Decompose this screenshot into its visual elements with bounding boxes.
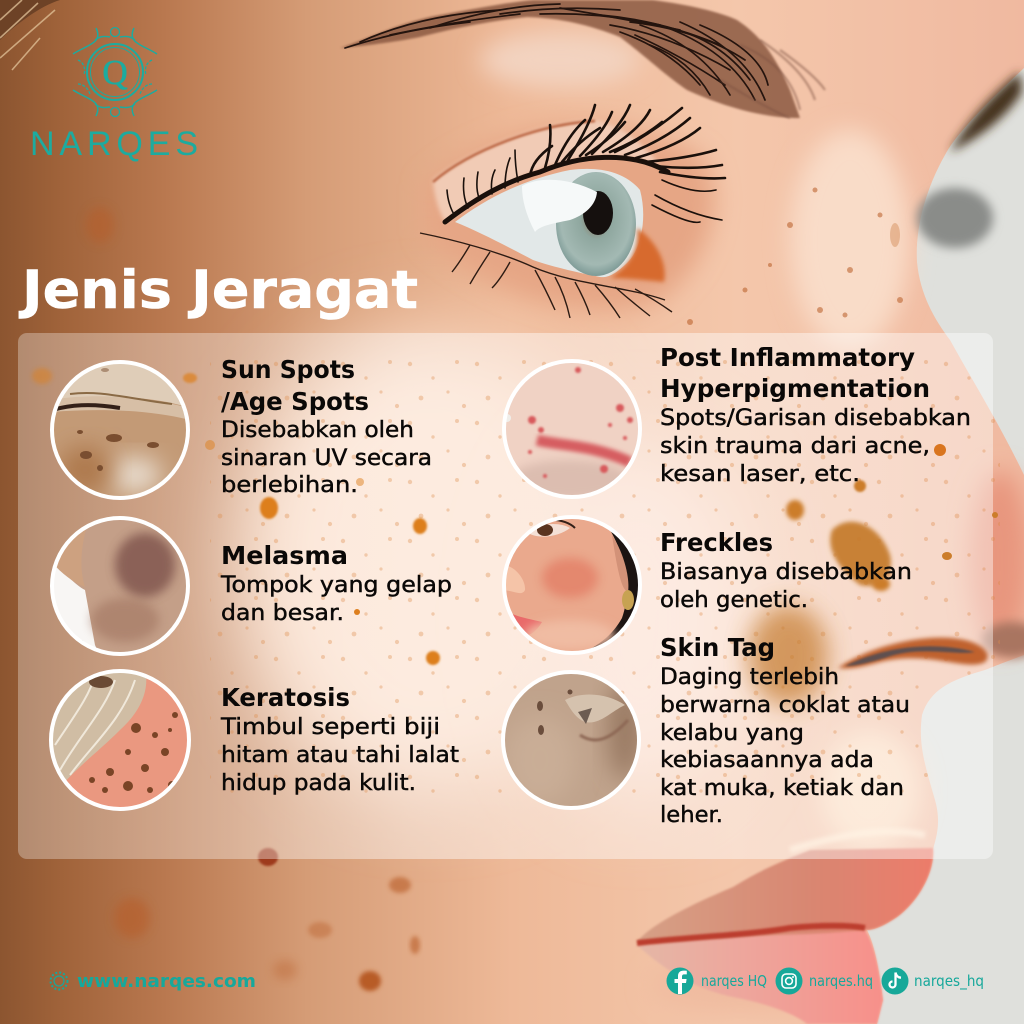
description: hyperpigmentation: kesan laser, etc. — [660, 462, 860, 487]
ring: sun spots — [52, 362, 188, 498]
iris and pupil — [556, 172, 636, 276]
website address: www.narqes.com — [77, 971, 256, 992]
eyebrow — [340, 0, 825, 118]
heading: post inflammatory: Post Inflammatory — [660, 343, 915, 372]
hair corner — [0, 0, 60, 40]
heading: skin tag: Skin Tag — [660, 633, 775, 662]
skin details showing through panel — [32, 360, 1000, 850]
philtrum highlight — [790, 831, 925, 850]
logo: Narqes — [30, 28, 198, 163]
description: skin tag: kebiasaannya ada — [660, 748, 874, 773]
description: hyperpigmentation: skin trauma dari acne, — [660, 434, 930, 459]
heading line 2: age spots: /Age Spots — [221, 387, 369, 416]
description: keratosis: Timbul seperti biji — [220, 715, 440, 740]
description: skin tag: kat muka, ketiak dan — [660, 776, 904, 801]
description: skin tag: Daging terlebih — [660, 665, 839, 690]
icon: website emblem — [50, 972, 68, 990]
photo: melasma — [54, 520, 186, 650]
photo: hyperpigmentation — [506, 363, 638, 495]
item: Post Inflammatory Hyperpigmentation — [502, 343, 971, 500]
description: melasma: dan besar. — [221, 601, 344, 626]
photo: skin tag — [505, 674, 637, 806]
background lashes, blurred — [950, 72, 1022, 152]
description: sun spots: berlebihan. — [221, 473, 358, 498]
description: sun spots: Disebabkan oleh — [221, 418, 414, 443]
eye — [420, 105, 725, 318]
description: skin tag: kelabu yang — [660, 721, 804, 746]
logo wordmark: NARQES — [30, 125, 198, 163]
ring: freckles — [504, 517, 640, 653]
nose shadow — [748, 605, 828, 705]
item: Keratosis — [50, 670, 459, 810]
description: skin tag: berwarna coklat atau — [660, 693, 910, 718]
skin blemishes below panel — [86, 188, 903, 991]
description: freckles: Biasanya disebabkan — [660, 560, 912, 585]
description: freckles: oleh genetic. — [660, 588, 808, 613]
photo: keratosis — [50, 670, 190, 810]
title: Jenis Jeragat — [19, 260, 418, 321]
nose blemish — [830, 522, 891, 586]
lower eyelashes — [420, 233, 672, 318]
description: melasma — [220, 573, 452, 626]
heading: melasma: Melasma — [221, 541, 348, 570]
icon: instagram — [776, 968, 802, 994]
description: keratosis: hitam atau tahi lalat — [221, 743, 459, 768]
icon: tiktok — [882, 968, 908, 994]
icon: facebook — [666, 968, 694, 994]
item: Skin Tag — [501, 633, 910, 828]
sclera — [455, 169, 643, 277]
photo: sun spots — [54, 364, 186, 496]
footer: social links — [666, 968, 984, 994]
footer: website — [50, 971, 256, 992]
eyelid — [433, 120, 660, 222]
upper eyelashes — [445, 105, 725, 222]
heading line 2: hyperpigmentation: Hyperpigmentation — [660, 374, 930, 403]
spots — [32, 368, 440, 665]
ring: keratosis — [51, 671, 189, 809]
orange inner lid — [610, 228, 665, 282]
logo Q: Q — [102, 53, 128, 92]
description: freckles — [660, 560, 912, 613]
description: hyperpigmentation: Spots/Garisan disebabkan — [660, 406, 971, 431]
nostril — [838, 638, 988, 669]
facebook handle: narqes HQ — [701, 972, 767, 990]
instagram handle: narqes.hq — [809, 972, 873, 990]
description: skin tag — [660, 665, 910, 828]
heading: keratosis: Keratosis — [221, 683, 350, 712]
item: Sun Spots / Age Spots — [50, 355, 432, 500]
heading: sun spots: Sun Spots — [221, 355, 355, 384]
ring: skin tag — [503, 672, 639, 808]
lips — [637, 848, 933, 1024]
description: keratosis: hidup pada kulit. — [221, 771, 416, 796]
description: melasma: Tompok yang gelap — [220, 573, 452, 598]
heading: freckles: Freckles — [660, 528, 773, 557]
logo emblem — [73, 28, 157, 116]
ring: hyperpigmentation — [504, 361, 640, 497]
description: keratosis — [220, 715, 459, 796]
corneal highlight — [522, 180, 597, 232]
description: skin tag: leher. — [660, 803, 723, 828]
ring: melasma — [52, 518, 188, 654]
description: sun spots: sinaran UV secara — [221, 446, 432, 471]
translucent content panel — [18, 333, 993, 859]
item: Freckles — [502, 516, 912, 656]
description: hyperpigmentation — [660, 406, 971, 487]
tiktok handle: narqes_hq — [914, 972, 984, 991]
item: Melasma — [50, 516, 452, 656]
description: sun spots — [221, 418, 432, 498]
eye socket shading — [425, 125, 714, 310]
photo: freckles — [506, 519, 638, 651]
